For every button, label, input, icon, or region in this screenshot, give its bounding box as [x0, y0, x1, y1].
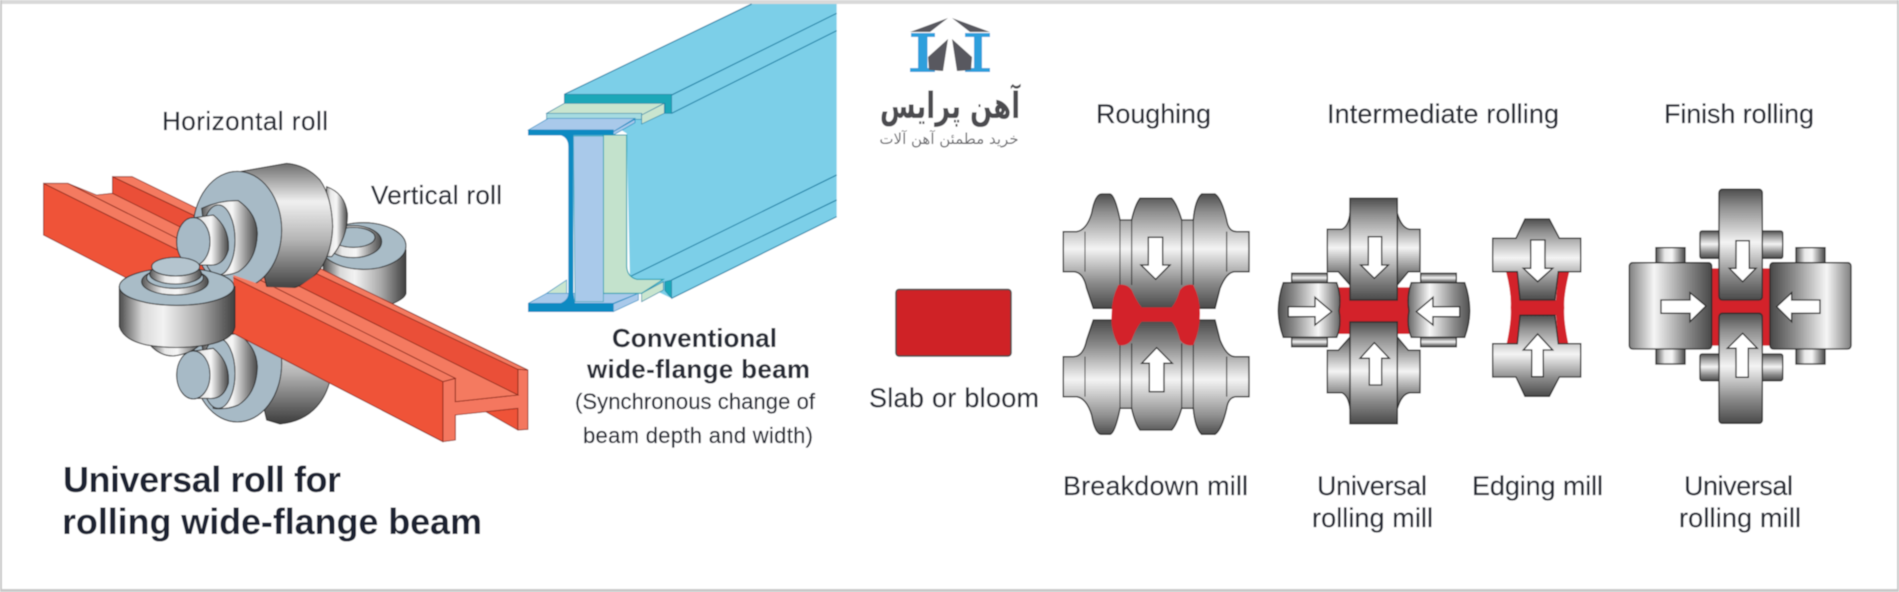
red wide-flange beam [44, 177, 528, 442]
upper roll [1719, 189, 1762, 300]
logo wordmark: آهن پرایس [880, 82, 1021, 127]
lower roll [1719, 313, 1762, 423]
lower horizontal roll [177, 297, 333, 424]
icon: roof and beams [910, 18, 990, 72]
diagram: breakdown mill [1063, 194, 1249, 434]
workpiece section [1712, 268, 1770, 346]
label: finish universal rolling mill: Universal [1684, 471, 1793, 501]
front top flange [528, 118, 635, 135]
heading: intermediate rolling: Intermediate rolling [1327, 99, 1559, 129]
heading: universal roll: Universal roll for [63, 459, 341, 500]
label: finish universal rolling mill [1679, 471, 1801, 533]
diagram: edging mill [1493, 219, 1581, 396]
upper horizontal roll [177, 163, 347, 291]
workpiece section [1338, 287, 1409, 334]
label: universal rolling mill [1312, 471, 1433, 533]
rear flange end [547, 94, 672, 302]
arrow: up [1142, 348, 1172, 392]
heading: roughing: Roughing [1096, 99, 1211, 129]
workpiece section [1506, 272, 1569, 344]
left roll [1629, 263, 1712, 349]
heading: universal roll: rolling wide-flange beam [62, 501, 482, 542]
label: breakdown mill: Breakdown mill [1063, 471, 1248, 501]
caption: conventional wide-flange beam: beam depth and width) [583, 423, 813, 448]
rear vertical roll [321, 223, 406, 304]
lower roll [1063, 320, 1249, 434]
diagram: intermediate universal rolling mill [1278, 198, 1470, 424]
left roll [1278, 273, 1340, 347]
heading: universal roll [62, 459, 482, 542]
arrow: down [1141, 237, 1170, 279]
upper roll [1327, 198, 1420, 300]
diagram: finish universal rolling mill [1629, 189, 1851, 423]
workpiece section [1111, 285, 1200, 345]
lower roll [1493, 315, 1581, 396]
slab or bloom block [896, 290, 1011, 356]
web [560, 135, 663, 303]
front vertical roll [119, 257, 235, 356]
label: universal rolling mill: rolling mill [1312, 503, 1433, 533]
right roll [1408, 273, 1470, 347]
arrows [1288, 237, 1460, 385]
upper roll [1493, 219, 1581, 300]
label: vertical roll: Vertical roll [371, 180, 502, 210]
beam long side [564, 4, 837, 298]
heading: finish rolling: Finish rolling [1664, 99, 1814, 129]
label: edging mill: Edging mill [1472, 471, 1603, 501]
panel: universal roll illustration [44, 163, 528, 442]
label: universal rolling mill: Universal [1317, 471, 1427, 501]
arrows [1523, 240, 1553, 377]
caption: conventional wide-flange beam: (Synchronous change of [575, 389, 816, 414]
lower roll [1327, 322, 1420, 424]
label: horizontal roll: Horizontal roll [162, 106, 328, 136]
right roll [1770, 263, 1851, 349]
logo tagline: خرید مطمئن آهن آلات [879, 130, 1019, 148]
label: finish universal rolling mill: rolling mill [1679, 503, 1801, 533]
panel: conventional wide-flange beam illustration [528, 4, 837, 312]
roll stubs [1656, 231, 1825, 381]
caption: conventional wide-flange beam: Conventional [612, 323, 777, 353]
caption: conventional wide-flange beam: wide-flange beam [586, 354, 810, 384]
label: slab or bloom: Slab or bloom [869, 383, 1039, 413]
arrows [1661, 241, 1820, 377]
caption: conventional wide-flange beam [575, 323, 816, 448]
upper roll [1063, 194, 1249, 308]
front bottom flange [528, 280, 638, 312]
logo [879, 18, 1021, 148]
beam section passing in front of the roll [232, 274, 528, 442]
